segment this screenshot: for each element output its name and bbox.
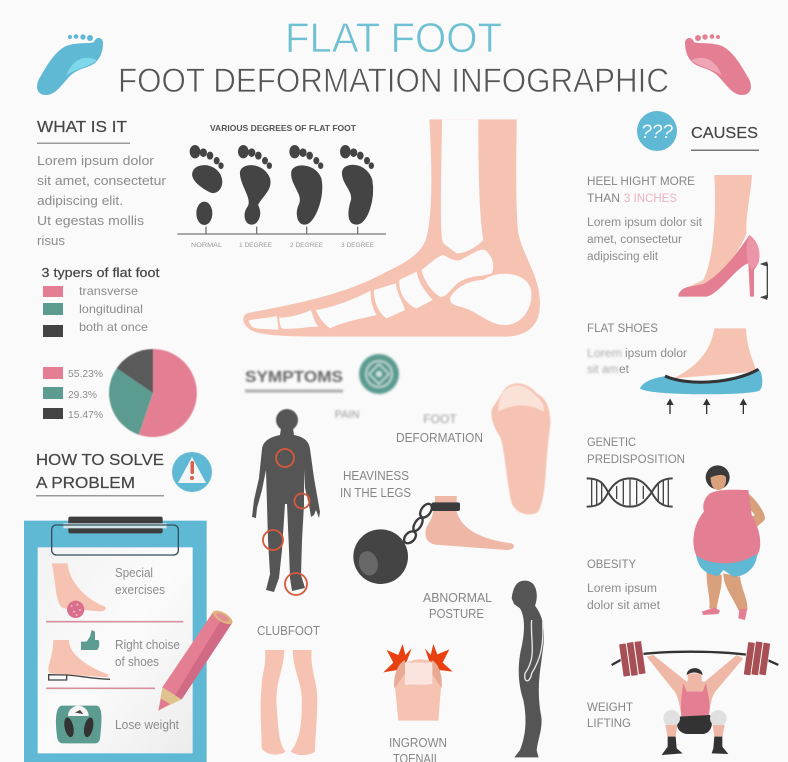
legend: percentages bbox=[43, 367, 103, 421]
legend: percentages: 55.23% bbox=[68, 368, 103, 380]
legend: 3 types of flat foot: 3 typers of flat foot bbox=[42, 266, 160, 280]
label: genetic predisposition: GENETIC bbox=[587, 435, 636, 449]
text block: flat shoes: ipsum dolor bbox=[625, 348, 687, 360]
label: genetic predisposition: PREDISPOSITION bbox=[587, 452, 685, 466]
chart: degrees of flat foot bbox=[177, 123, 386, 249]
text block: description: risus bbox=[37, 234, 65, 248]
heading: how to solve a problem: A PROBLEM bbox=[36, 475, 135, 492]
label: foot deformation: DEFORMATION bbox=[396, 431, 483, 445]
icon: question marks: ??? bbox=[641, 122, 673, 143]
icon: blue footprint bbox=[37, 34, 103, 95]
chart: pie bbox=[109, 349, 197, 437]
illustration: deformed foot bbox=[491, 383, 550, 514]
legend: percentages: 15.47% bbox=[68, 409, 103, 421]
title bbox=[118, 14, 669, 100]
text block: clipboard items: Lose weight bbox=[115, 718, 179, 732]
chart: degrees of flat foot: 2 DEGREE bbox=[290, 242, 324, 249]
label: genetic predisposition bbox=[587, 435, 685, 466]
text block: obesity: OBESITY bbox=[587, 557, 636, 571]
panel: what is it bbox=[37, 119, 166, 248]
icon: pencil bbox=[158, 608, 235, 711]
label: heaviness in the legs: IN THE LEGS bbox=[340, 486, 411, 500]
text block: clipboard items bbox=[115, 566, 180, 732]
text block: description: sit amet, consectetur bbox=[37, 174, 166, 188]
text block: flat shoes: Lorem bbox=[587, 348, 622, 360]
panel: clipboard bbox=[24, 517, 235, 762]
label: abnormal posture: POSTURE bbox=[429, 607, 484, 621]
chart: degrees of flat foot: 1 DEGREE bbox=[239, 242, 273, 249]
text block: obesity: Lorem ipsum bbox=[587, 583, 657, 595]
title: FLAT FOOT bbox=[285, 14, 502, 61]
chart: degrees of flat foot: 3 DEGREE bbox=[341, 242, 375, 249]
label: pain: PAIN bbox=[335, 409, 359, 421]
label: abnormal posture bbox=[423, 591, 492, 621]
label: ingrown toenail bbox=[389, 736, 447, 762]
chart: degrees of flat foot: VARIOUS DEGREES OF FLAT FOOT bbox=[210, 123, 357, 133]
panel: symptoms heading: SYMPTOMS bbox=[245, 369, 343, 386]
text block: flat shoes: et bbox=[619, 364, 630, 376]
illustration: clubfoot legs bbox=[261, 650, 317, 755]
text block: description: Lorem ipsum dolor bbox=[37, 154, 154, 168]
footprint: 2 degree bbox=[290, 146, 323, 224]
icon: shoe insole foot bbox=[48, 640, 110, 680]
heading: how to solve a problem: HOW TO SOLVE bbox=[36, 452, 164, 469]
text block: description: Ut egestas mollis bbox=[37, 214, 144, 228]
text block: obesity bbox=[587, 557, 661, 612]
illustration: posture silhouette bbox=[512, 581, 544, 757]
text block: clipboard items: of shoes bbox=[115, 655, 159, 669]
icon: target bbox=[359, 354, 399, 394]
label: weight lifting: LIFTING bbox=[587, 716, 631, 730]
heading: causes: CAUSES bbox=[691, 125, 758, 142]
icon: warning bbox=[172, 452, 212, 492]
illustration: ingrown toenail bbox=[383, 644, 453, 721]
illustration: flat shoe bbox=[640, 328, 762, 414]
illustration: human body with pain points bbox=[252, 409, 320, 595]
icon: foot with ball bbox=[52, 563, 106, 618]
label: foot deformation bbox=[396, 412, 483, 445]
icon: scale bbox=[56, 706, 101, 743]
text block: flat shoes: sit am bbox=[587, 364, 618, 376]
label: clubfoot: CLUBFOOT bbox=[257, 624, 320, 638]
icon: dna bbox=[587, 478, 673, 507]
heading: how to solve a problem bbox=[36, 452, 164, 496]
label: weight lifting: WEIGHT bbox=[587, 700, 634, 714]
text block: description bbox=[37, 154, 166, 248]
panel: symptoms heading bbox=[245, 354, 399, 394]
icon: thumbs up bbox=[81, 630, 99, 650]
label: abnormal posture: ABNORMAL bbox=[423, 591, 492, 605]
label: heaviness in the legs bbox=[340, 469, 411, 500]
illustration: ball and chain on foot bbox=[353, 496, 514, 584]
footprint: normal bbox=[190, 146, 223, 224]
text block: flat shoes: FLAT SHOES bbox=[587, 321, 658, 335]
text block: heel height bbox=[587, 174, 703, 263]
legend: 3 types of flat foot: transverse bbox=[79, 284, 138, 298]
legend: percentages: 29.3% bbox=[68, 389, 97, 401]
legend: 3 types of flat foot: both at once bbox=[79, 320, 148, 334]
text block: obesity: dolor sit amet bbox=[587, 600, 661, 612]
title: FOOT DEFORMATION INFOGRAPHIC bbox=[118, 62, 669, 100]
heading: causes bbox=[691, 125, 759, 151]
illustration: obese woman bbox=[693, 465, 765, 620]
text block: clipboard items: Special bbox=[115, 566, 153, 580]
text block: heel height: HEEL HIGHT MORE bbox=[587, 174, 695, 188]
label: ingrown toenail: INGROWN bbox=[389, 736, 447, 750]
text block: heel height: adipiscing elit bbox=[587, 251, 659, 263]
chart: degrees of flat foot: NORMAL bbox=[191, 242, 222, 249]
text block: flat shoes bbox=[587, 321, 687, 376]
text block: clipboard items: exercises bbox=[115, 583, 165, 597]
text block: clipboard items: Right choise bbox=[115, 638, 180, 652]
heading: what is it: WHAT IS IT bbox=[37, 119, 127, 136]
text block: heel height: THAN bbox=[587, 191, 620, 205]
illustration: high heel bbox=[678, 175, 767, 300]
text block: heel height: 3 INCHES bbox=[624, 191, 677, 205]
legend: 3 types of flat foot bbox=[42, 266, 160, 337]
illustration: weight lifter bbox=[612, 641, 778, 755]
label: weight lifting bbox=[587, 700, 634, 730]
icon: pink footprint bbox=[685, 34, 751, 95]
label: heaviness in the legs: HEAVINESS bbox=[343, 469, 409, 483]
footprint: 3 degree bbox=[341, 146, 373, 224]
illustration: foot skeleton bbox=[243, 119, 540, 337]
icon: question marks bbox=[637, 111, 677, 151]
footprint: 1 degree bbox=[239, 146, 271, 224]
legend: 3 types of flat foot: longitudinal bbox=[79, 302, 143, 316]
text block: description: adipiscing elit. bbox=[37, 194, 123, 208]
label: foot deformation: FOOT bbox=[423, 412, 457, 426]
text block: heel height: Lorem ipsum dolor sit bbox=[587, 217, 703, 229]
text block: heel height: amet, consectetur bbox=[587, 234, 682, 246]
